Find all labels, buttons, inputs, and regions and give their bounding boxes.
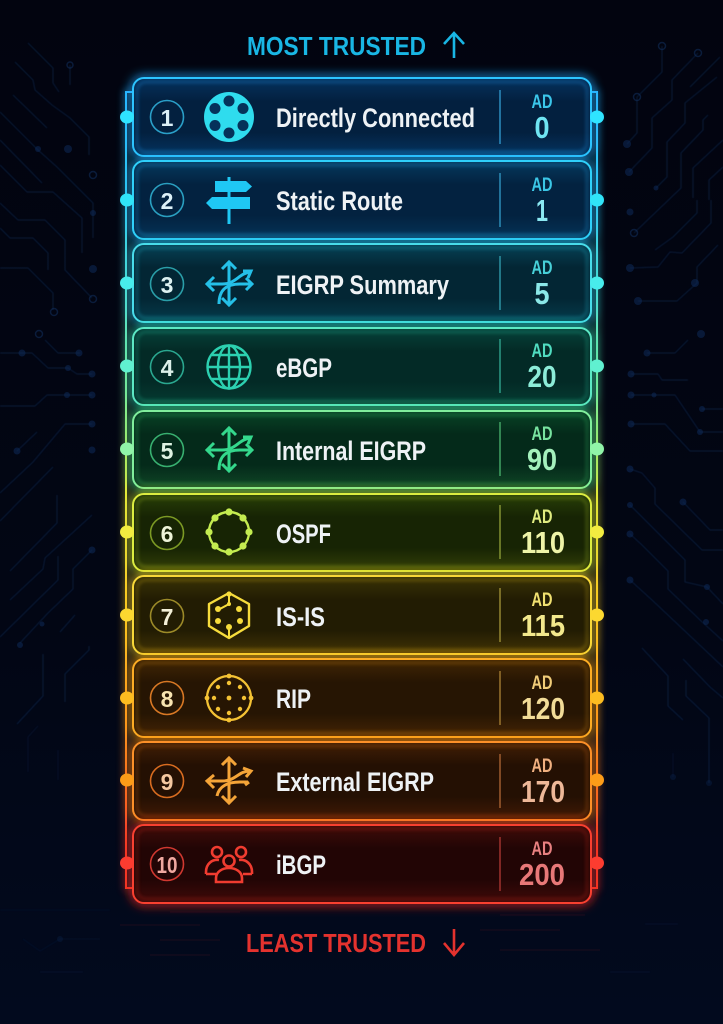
- circuit nodes left: [14, 62, 97, 942]
- row 7: IS-IS: [120, 576, 604, 654]
- row 5: Internal EIGRP: Internal EIGRP: [276, 436, 426, 466]
- row 6: OSPF: 110: [521, 525, 565, 560]
- row 5: Internal EIGRP: 90: [527, 442, 557, 477]
- row 10: iBGP: 10: [156, 852, 178, 878]
- row 3: EIGRP Summary: 5: [534, 276, 550, 311]
- row 3: EIGRP Summary: [120, 244, 604, 322]
- icon: branching arrows: [207, 758, 251, 803]
- row 3: EIGRP Summary: EIGRP Summary: [276, 270, 449, 300]
- icon: branching arrows: [207, 428, 252, 471]
- row 4: eBGP: [120, 328, 604, 405]
- row 2: Static Route: [120, 161, 604, 239]
- row 7: IS-IS: AD: [532, 590, 552, 611]
- row 8: RIP: RIP: [276, 684, 311, 714]
- row 2: Static Route: 1: [536, 193, 548, 228]
- row 8: RIP: [120, 659, 604, 737]
- row 5: Internal EIGRP: 5: [161, 438, 174, 464]
- row 7: IS-IS: 115: [521, 608, 565, 643]
- icon: signpost: [206, 177, 252, 224]
- row 10: iBGP: [120, 825, 604, 903]
- row 9: External EIGRP: External EIGRP: [276, 767, 434, 797]
- row 5: Internal EIGRP: [120, 411, 604, 488]
- row 3: EIGRP Summary: 3: [161, 272, 173, 298]
- row 6: OSPF: 6: [161, 521, 173, 547]
- row 1: Directly Connected: AD: [532, 92, 552, 113]
- row 9: External EIGRP: 9: [161, 769, 173, 795]
- row 8: RIP: 8: [161, 686, 174, 712]
- row 9: External EIGRP: [120, 742, 604, 820]
- row 1: Directly Connected: [120, 78, 604, 156]
- heading: least trusted: LEAST TRUSTED: [246, 928, 426, 958]
- row 6: OSPF: AD: [532, 507, 552, 528]
- row 10: iBGP: iBGP: [276, 850, 326, 880]
- row 7: IS-IS: 7: [161, 604, 173, 630]
- heading: most trusted: MOST TRUSTED: [247, 31, 426, 61]
- row 8: RIP: AD: [532, 673, 552, 694]
- row 2: Static Route: Static Route: [276, 186, 403, 216]
- row 4: eBGP: AD: [532, 341, 552, 362]
- icon: globe: [208, 346, 250, 388]
- icon: hexagon nodes: [209, 591, 249, 638]
- row 10: iBGP: AD: [532, 839, 552, 860]
- row 4: eBGP: 20: [528, 359, 556, 394]
- circuit traces right: [610, 46, 723, 972]
- faint red traces below list: [120, 912, 600, 955]
- row 1: Directly Connected: Directly Connected: [276, 103, 475, 133]
- row 10: iBGP: 200: [519, 857, 565, 892]
- row 9: External EIGRP: AD: [532, 756, 552, 777]
- row 8: RIP: 120: [521, 691, 565, 726]
- right connector rail: [591, 92, 597, 888]
- icon: branching arrows: [207, 262, 252, 305]
- row 1: Directly Connected: 1: [161, 105, 174, 131]
- row 5: Internal EIGRP: AD: [532, 424, 552, 445]
- icon: OSPF ring: [205, 508, 253, 556]
- row 9: External EIGRP: 170: [521, 774, 565, 809]
- row 1: Directly Connected: 0: [534, 110, 550, 145]
- left connector rail: [126, 92, 133, 888]
- row 2: Static Route: 2: [161, 188, 173, 214]
- row 4: eBGP: 4: [161, 355, 174, 381]
- circuit traces left: [0, 43, 110, 972]
- row 2: Static Route: AD: [532, 175, 552, 196]
- row 6: OSPF: [120, 494, 604, 571]
- row 6: OSPF: OSPF: [276, 519, 331, 549]
- row 7: IS-IS: IS-IS: [276, 602, 325, 632]
- row 4: eBGP: eBGP: [276, 353, 332, 383]
- row 3: EIGRP Summary: AD: [532, 258, 552, 279]
- icon: three people: [206, 847, 252, 882]
- circuit nodes right: [623, 42, 712, 786]
- icon: network hub: [204, 92, 254, 142]
- icon: RIP dial: [205, 674, 253, 722]
